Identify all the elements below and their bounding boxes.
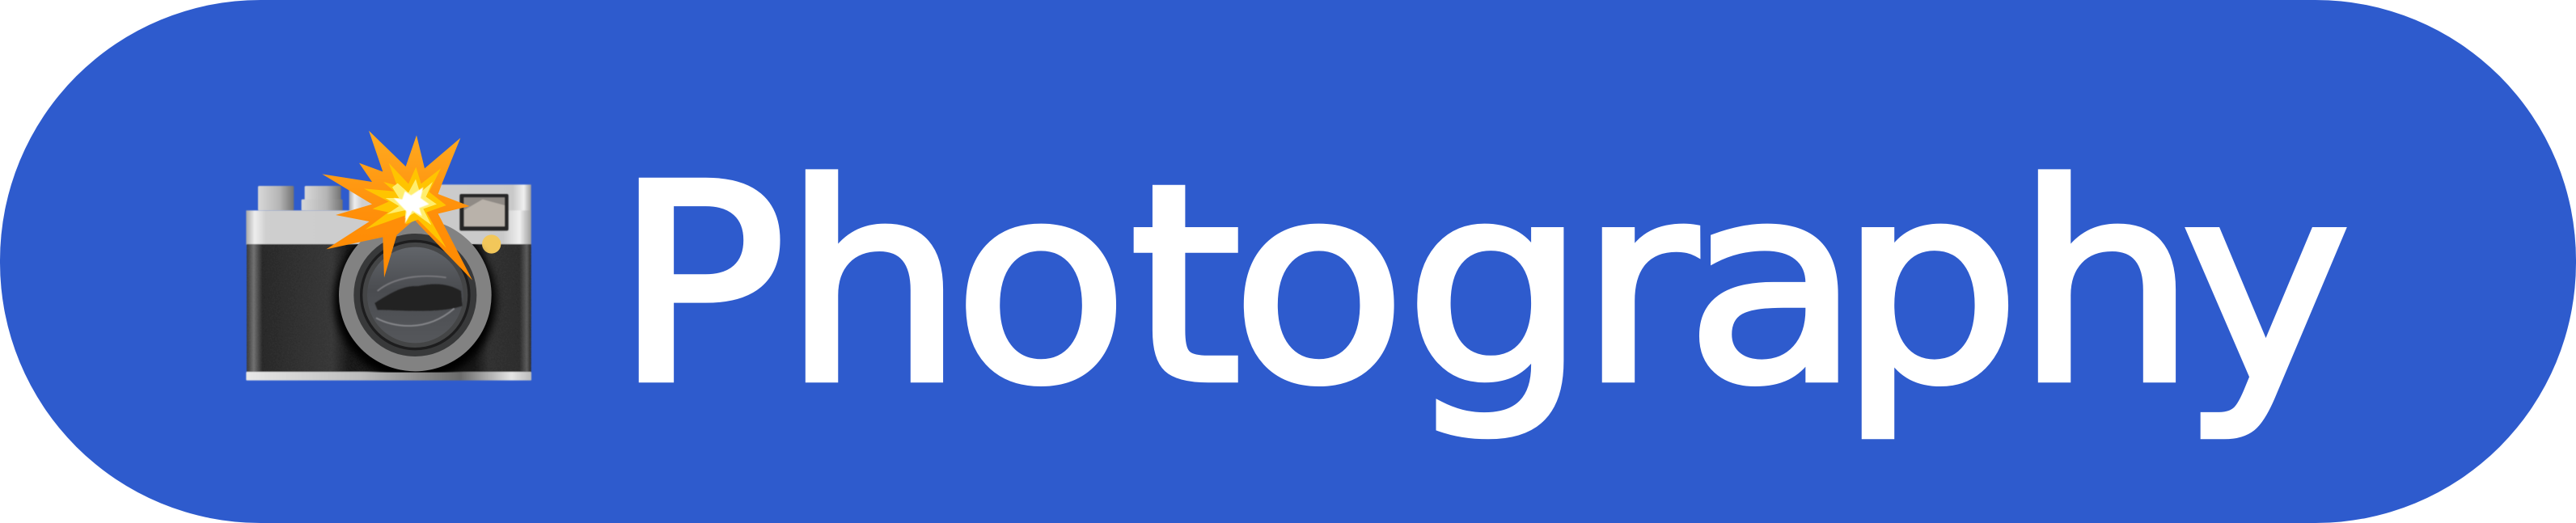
viewfinder window [459, 194, 509, 230]
camera lens [334, 219, 496, 382]
camera dials [258, 186, 343, 211]
yellow indicator dot [482, 234, 501, 254]
camera body [246, 184, 531, 381]
flash burst [322, 131, 472, 280]
title: Photography [614, 128, 2350, 444]
icon: camera with flash [246, 131, 531, 382]
